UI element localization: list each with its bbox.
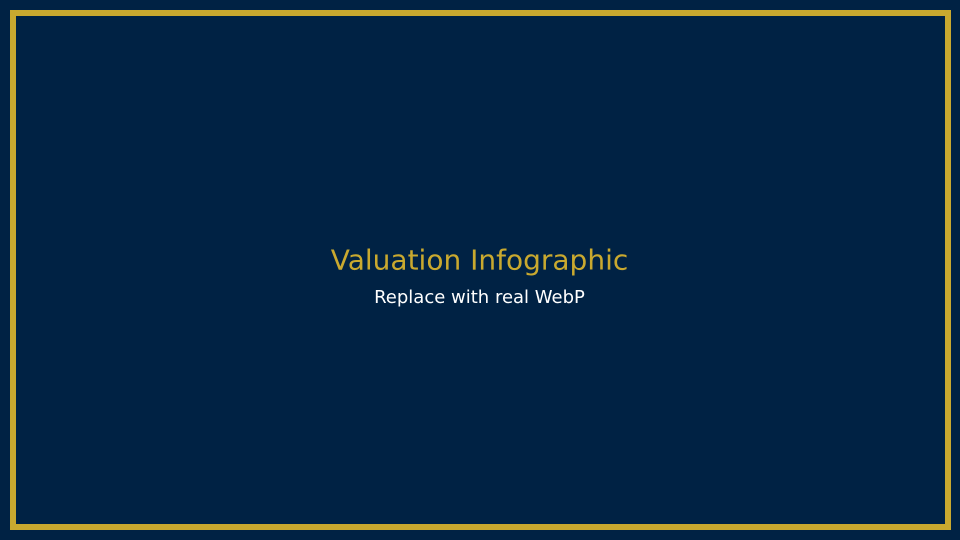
title: Valuation Infographic — [331, 244, 628, 276]
subtitle: Replace with real WebP — [374, 287, 585, 308]
